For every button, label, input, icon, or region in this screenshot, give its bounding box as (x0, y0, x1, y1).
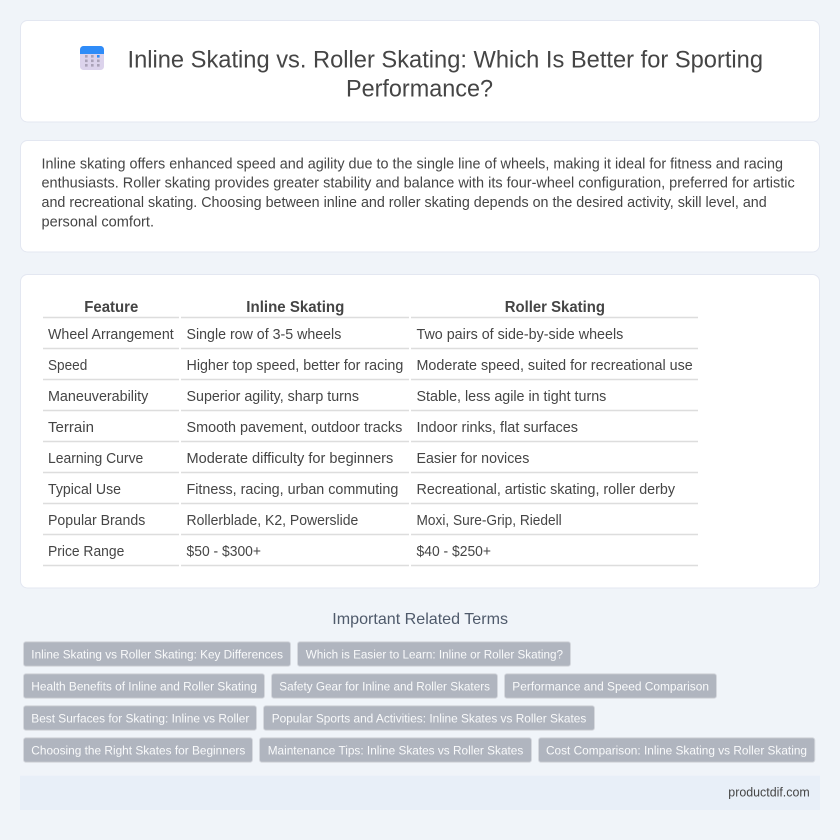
title: Performance? (346, 76, 493, 102)
row: maneuverability (43, 389, 698, 410)
row: terrain: Terrain (48, 420, 94, 436)
table header row: Feature (84, 299, 138, 316)
title: Inline Skating vs. Roller Skating: Which Is Better for Sporting (128, 46, 763, 74)
header panel (20, 20, 820, 122)
footer source text: productdif.com (728, 784, 810, 800)
tag: performance and speed (504, 674, 716, 698)
row: speed: Speed (48, 358, 87, 374)
row: terrain: Smooth pavement, outdoor tracks (186, 420, 402, 436)
table header row: Inline Skating (246, 299, 344, 316)
description text (42, 156, 795, 231)
row: terrain: Indoor rinks, flat surfaces (416, 420, 578, 436)
row: typical use: Recreational, artistic skating, roller derby (416, 482, 676, 498)
related terms tags (24, 642, 815, 762)
tag: choosing skates: Choosing the Right Skates for Beginners (31, 743, 245, 757)
row: popular brands: Rollerblade, K2, Powerslide (186, 513, 358, 529)
footer bar (20, 776, 820, 810)
row: popular brands (43, 513, 698, 534)
tag: best surfaces: Best Surfaces for Skating: Inline vs Roller (31, 711, 249, 725)
row: price range: Price Range (48, 544, 124, 560)
tag: safety gear: Safety Gear for Inline and Roller Skaters (279, 679, 490, 693)
table header row: Roller Skating (505, 299, 605, 316)
tag: safety gear (272, 674, 498, 698)
row: popular brands: Moxi, Sure-Grip, Riedell (416, 513, 562, 529)
tag: best surfaces (24, 706, 256, 730)
tag: health benefits: Health Benefits of Inline and Roller Skating (31, 679, 257, 693)
row: terrain (43, 420, 698, 442)
row: learning curve (43, 451, 698, 472)
row: typical use (43, 482, 698, 504)
row: price range: $40 - $250+ (416, 544, 491, 560)
row: speed: Higher top speed, better for racing (186, 358, 403, 374)
row: price range (43, 544, 698, 566)
tag: performance and speed: Performance and Speed Comparison (512, 679, 709, 693)
row: typical use: Typical Use (48, 482, 121, 498)
row: popular brands: Popular Brands (48, 513, 145, 529)
description text: personal comfort. (42, 215, 154, 231)
row: learning curve: Moderate difficulty for beginners (186, 451, 393, 467)
panel: comparison table (20, 274, 820, 588)
tag: maintenance tips (260, 738, 532, 762)
tag: cost comparison (538, 738, 815, 762)
description text: and recreational skating. Choosing between inline and roller skating depends on the desired activity, skill level, and (42, 195, 767, 211)
tag: maintenance tips: Maintenance Tips: Inline Skates vs Roller Skates (268, 743, 523, 757)
icon: calendar (80, 46, 104, 70)
title (128, 46, 763, 102)
row: wheel arrangement: Wheel Arrangement (48, 327, 174, 343)
row: maneuverability: Maneuverability (48, 389, 149, 405)
related terms heading: Important Related Terms (332, 611, 508, 628)
tag: health benefits (24, 674, 264, 698)
row: maneuverability: Stable, less agile in tight turns (416, 389, 606, 405)
tag: popular sports: Popular Sports and Activities: Inline Skates vs Roller Skates (272, 711, 586, 725)
tag: easier to learn (298, 642, 570, 666)
tag: easier to learn: Which is Easier to Learn: Inline or Roller Skating? (306, 647, 563, 661)
tag: key differences: Inline Skating vs Roller Skating: Key Differences (31, 647, 283, 661)
description text: enthusiasts. Roller skating provides greater stability and balance with its four-wheel configuration, preferred for artistic (42, 176, 795, 192)
tag: key differences (24, 642, 290, 666)
row: wheel arrangement (43, 327, 698, 348)
tag: popular sports (264, 706, 594, 730)
row: wheel arrangement: Single row of 3-5 wheels (186, 327, 341, 343)
description text: Inline skating offers enhanced speed and agility due to the single line of wheels, making it ideal for fitness and racing (42, 156, 783, 172)
row: typical use: Fitness, racing, urban commuting (186, 482, 398, 498)
row: learning curve: Learning Curve (48, 451, 143, 467)
panel: description (20, 140, 820, 252)
table header row (43, 299, 698, 318)
tag: choosing skates (24, 738, 252, 762)
row: speed (43, 358, 698, 380)
row: learning curve: Easier for novices (416, 451, 529, 467)
row: maneuverability: Superior agility, sharp turns (186, 389, 359, 405)
row: wheel arrangement: Two pairs of side-by-side wheels (416, 327, 623, 343)
row: speed: Moderate speed, suited for recreational use (416, 358, 693, 374)
tag: cost comparison: Cost Comparison: Inline Skating vs Roller Skating (546, 743, 807, 757)
row: price range: $50 - $300+ (186, 544, 261, 560)
